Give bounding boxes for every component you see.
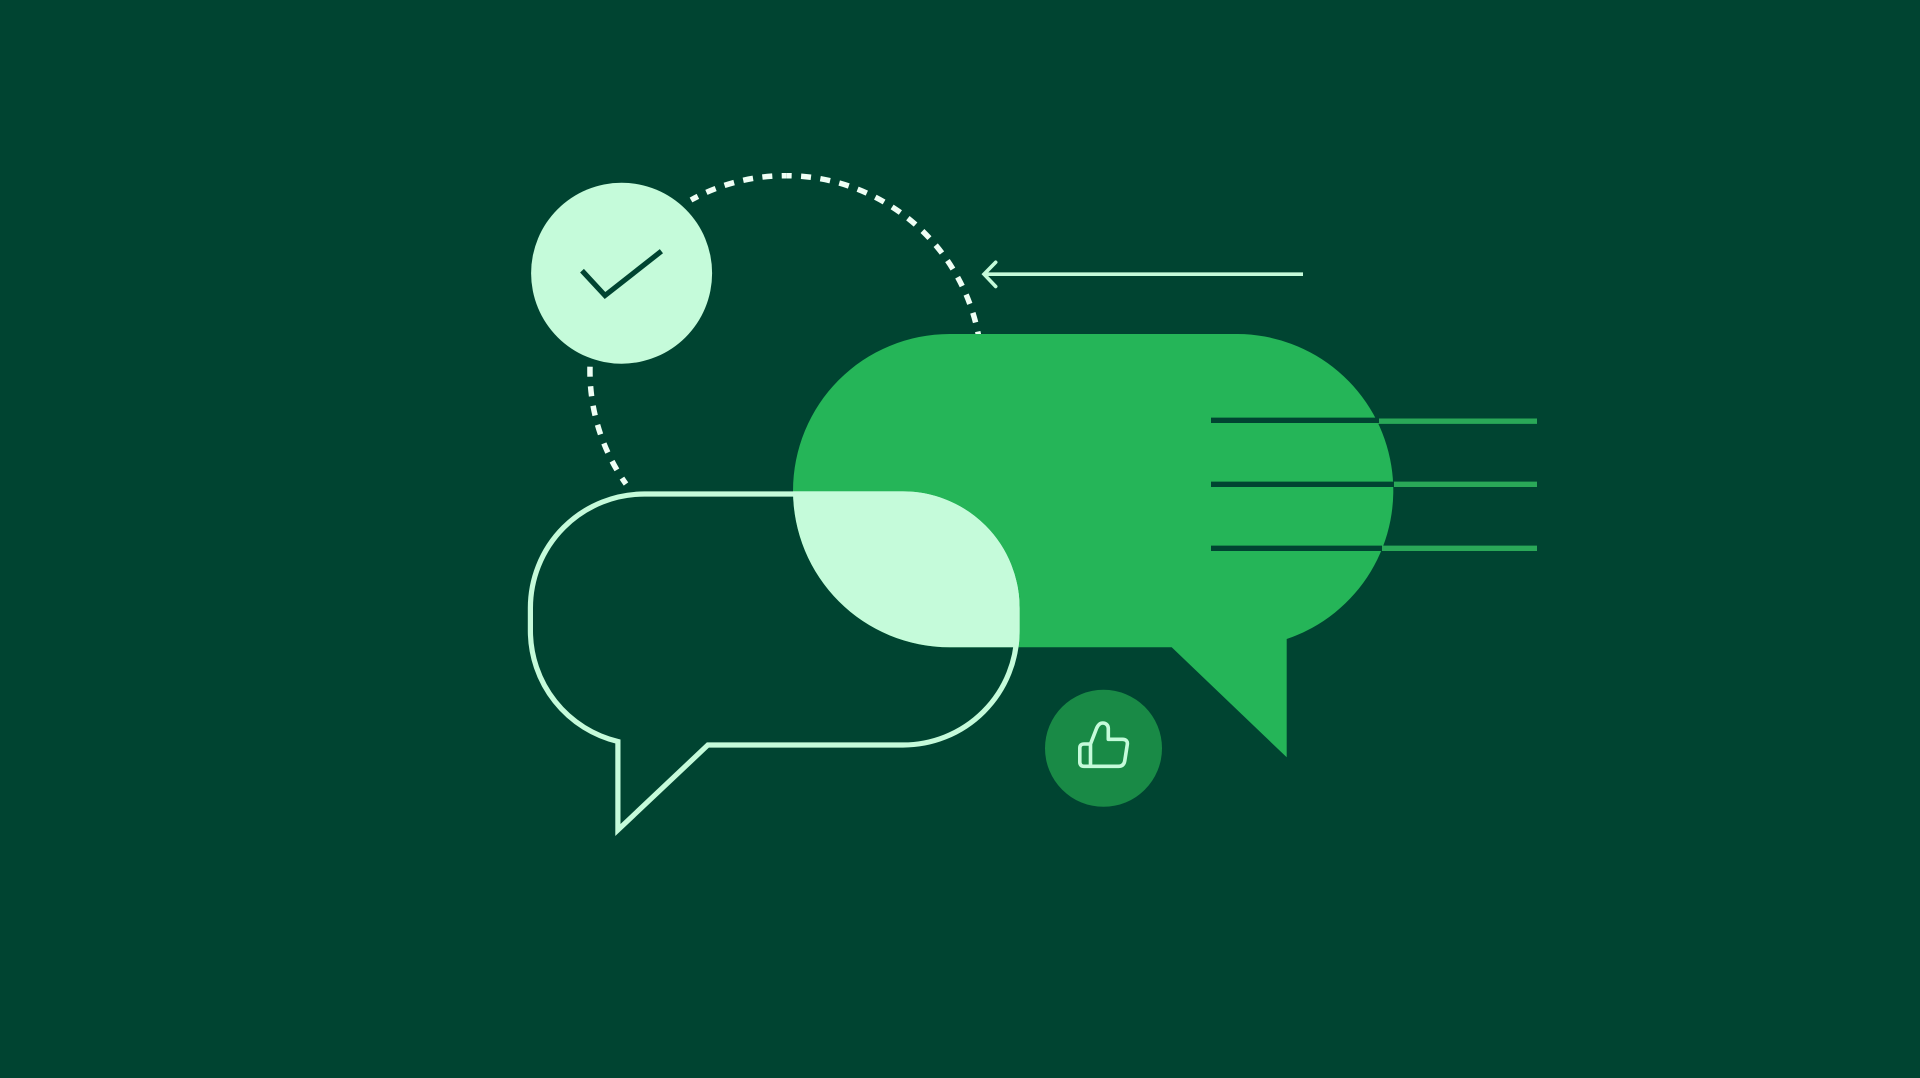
icon: check mark xyxy=(582,251,661,296)
text lines: three horizontal rules xyxy=(1211,420,1537,548)
overlap of the two bubbles xyxy=(793,491,1020,648)
filled green speech bubble xyxy=(793,334,1393,757)
icon: thumbs up xyxy=(1080,723,1127,766)
thumbs-up badge xyxy=(1045,690,1162,807)
illustration: overlapping chat bubbles xyxy=(528,173,1537,836)
outlined speech bubble xyxy=(530,494,1017,830)
arrow pointing left xyxy=(984,262,1303,286)
dashed arc connector xyxy=(590,176,979,484)
check badge xyxy=(531,183,712,364)
